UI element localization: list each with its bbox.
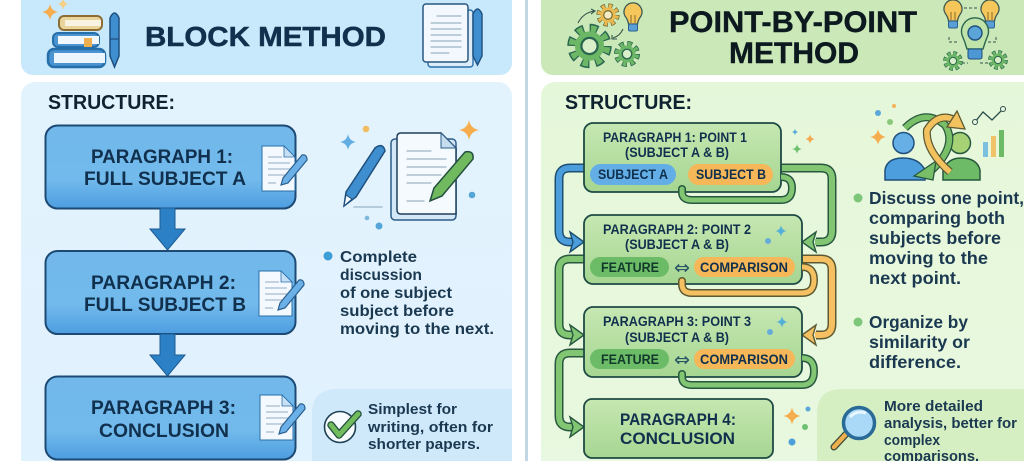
heading: structure: STRUCTURE: — [565, 92, 692, 114]
divider between methods — [525, 0, 528, 461]
box: paragraph 2: FULL SUBJECT B — [84, 295, 246, 316]
icon: magnifying glass — [834, 408, 874, 447]
text: complete discussion bullet: subject before — [340, 303, 454, 320]
text: organize by bullet: similarity or — [869, 332, 970, 352]
icon: books and pen — [42, 0, 119, 67]
arrow: green connector paragraph 2 to 3 — [559, 259, 586, 345]
callout: more detailed analysis: analysis, better for — [884, 415, 1017, 432]
title: point-by-point method: POINT-BY-POINT — [669, 6, 917, 39]
icon: sparkles beside paragraph 4 — [783, 406, 810, 446]
arrow: paragraph 2 to 3 — [150, 334, 185, 376]
text: complete discussion bullet: Complete — [340, 249, 417, 266]
box: paragraph 1 point 1: (SUBJECT A & B) — [625, 145, 729, 160]
arrow: green connector paragraph 1 to 2 — [779, 168, 832, 252]
loop: paragraph 2 orange — [678, 267, 814, 293]
pill: comparison — [694, 349, 795, 369]
pill: comparison — [694, 257, 795, 277]
callout: simplest for writing: Simplest for — [368, 401, 457, 418]
callout: simplest for writing: writing, often for — [367, 419, 493, 436]
text: complete discussion bullet: of one subject — [340, 285, 452, 302]
box: paragraph 2 — [46, 251, 304, 334]
box: paragraph 1 point 1: PARAGRAPH 1: POINT 1 — [603, 130, 747, 145]
box: paragraph 2 point 2 — [584, 215, 802, 284]
text: discuss one point bullet: subjects before — [869, 228, 1001, 248]
callout: simplest for writing — [312, 389, 512, 461]
title: point-by-point method — [669, 6, 917, 70]
text: discuss one point bullet — [854, 188, 1024, 288]
icon: bulbs and gears network — [944, 0, 1005, 68]
panel: block method body — [21, 82, 512, 461]
box: paragraph 2 point 2: (SUBJECT A & B) — [625, 237, 729, 252]
box: paragraph 3: CONCLUSION — [99, 421, 229, 442]
box: paragraph 4 conclusion: PARAGRAPH 4: — [620, 411, 736, 429]
title: point-by-point method: METHOD — [729, 37, 859, 70]
text: complete discussion bullet — [324, 249, 494, 338]
text: discuss one point bullet: next point. — [869, 268, 961, 288]
panel: point-by-point body — [541, 82, 1024, 461]
loop: paragraph 1 green — [678, 177, 792, 200]
callout: more detailed analysis: complex — [884, 432, 941, 449]
arrow: orange connector paragraph 2 to 3 — [800, 259, 832, 345]
box: paragraph 2 point 2: PARAGRAPH 2: POINT 2 — [603, 222, 751, 237]
pill: feature — [590, 349, 669, 369]
icon: document and pen — [423, 4, 482, 67]
box: paragraph 3 point 3: (SUBJECT A & B) — [625, 330, 729, 345]
icon: check mark — [324, 412, 358, 442]
box: paragraph 4 conclusion: CONCLUSION — [620, 430, 735, 448]
pill: subject b — [688, 164, 773, 185]
icon: compare arrows: ⇔ — [674, 349, 690, 371]
text: organize by bullet: Organize by — [869, 312, 968, 332]
icon: sparkles beside paragraph 1 — [792, 129, 815, 154]
pill: subject a — [590, 164, 676, 185]
callout: simplest for writing: shorter papers. — [368, 436, 480, 453]
box: paragraph 1: PARAGRAPH 1: — [91, 147, 233, 168]
title: block method: BLOCK METHOD — [145, 21, 386, 52]
panel: block method header — [21, 0, 512, 75]
pill: comparison: COMPARISON — [700, 260, 788, 275]
pill: comparison: COMPARISON — [700, 352, 788, 367]
panel: point-by-point header — [541, 0, 1024, 75]
pill: feature — [590, 257, 669, 277]
icon: gears and bulb — [573, 3, 642, 63]
pill: subject b: SUBJECT B — [696, 166, 766, 182]
text: organize by bullet: difference. — [869, 352, 961, 372]
box: paragraph 3: PARAGRAPH 3: — [91, 398, 236, 419]
arrow: green connector paragraph 3 to 4 — [559, 353, 586, 437]
heading: structure: STRUCTURE: — [48, 92, 175, 114]
box: paragraph 1 — [46, 126, 307, 208]
text: complete discussion bullet: moving to the next. — [340, 321, 494, 338]
text: discuss one point bullet: comparing both — [869, 208, 1005, 228]
text: discuss one point bullet: Discuss one point, — [869, 188, 1024, 208]
box: paragraph 3 point 3 — [584, 307, 802, 377]
box: paragraph 1 point 1 — [584, 123, 781, 192]
box: paragraph 1: FULL SUBJECT A — [84, 169, 246, 190]
arrow: paragraph 1 to 2 — [150, 208, 185, 250]
pill: feature: FEATURE — [601, 352, 659, 367]
box: paragraph 4 conclusion — [584, 399, 773, 458]
box: paragraph 3 point 3: PARAGRAPH 3: POINT 3 — [603, 314, 751, 329]
arrow: blue connector paragraph 1 to 2 — [559, 168, 586, 252]
text: organize by bullet — [854, 312, 970, 372]
text: discuss one point bullet: moving to the — [869, 248, 988, 268]
callout: more detailed analysis: More detailed — [884, 398, 983, 415]
box: paragraph 3 — [46, 376, 305, 460]
icon: two people comparing — [870, 104, 1006, 180]
loop: paragraph 3 green — [678, 358, 814, 385]
callout: more detailed analysis — [817, 389, 1024, 461]
icon: pens and paper illustration — [340, 120, 479, 230]
icon: compare arrows: ⇔ — [674, 257, 690, 279]
pill: subject a: SUBJECT A — [598, 166, 668, 182]
text: complete discussion bullet: discussion — [340, 267, 422, 284]
box: paragraph 2: PARAGRAPH 2: — [91, 273, 236, 294]
pill: feature: FEATURE — [601, 260, 659, 275]
